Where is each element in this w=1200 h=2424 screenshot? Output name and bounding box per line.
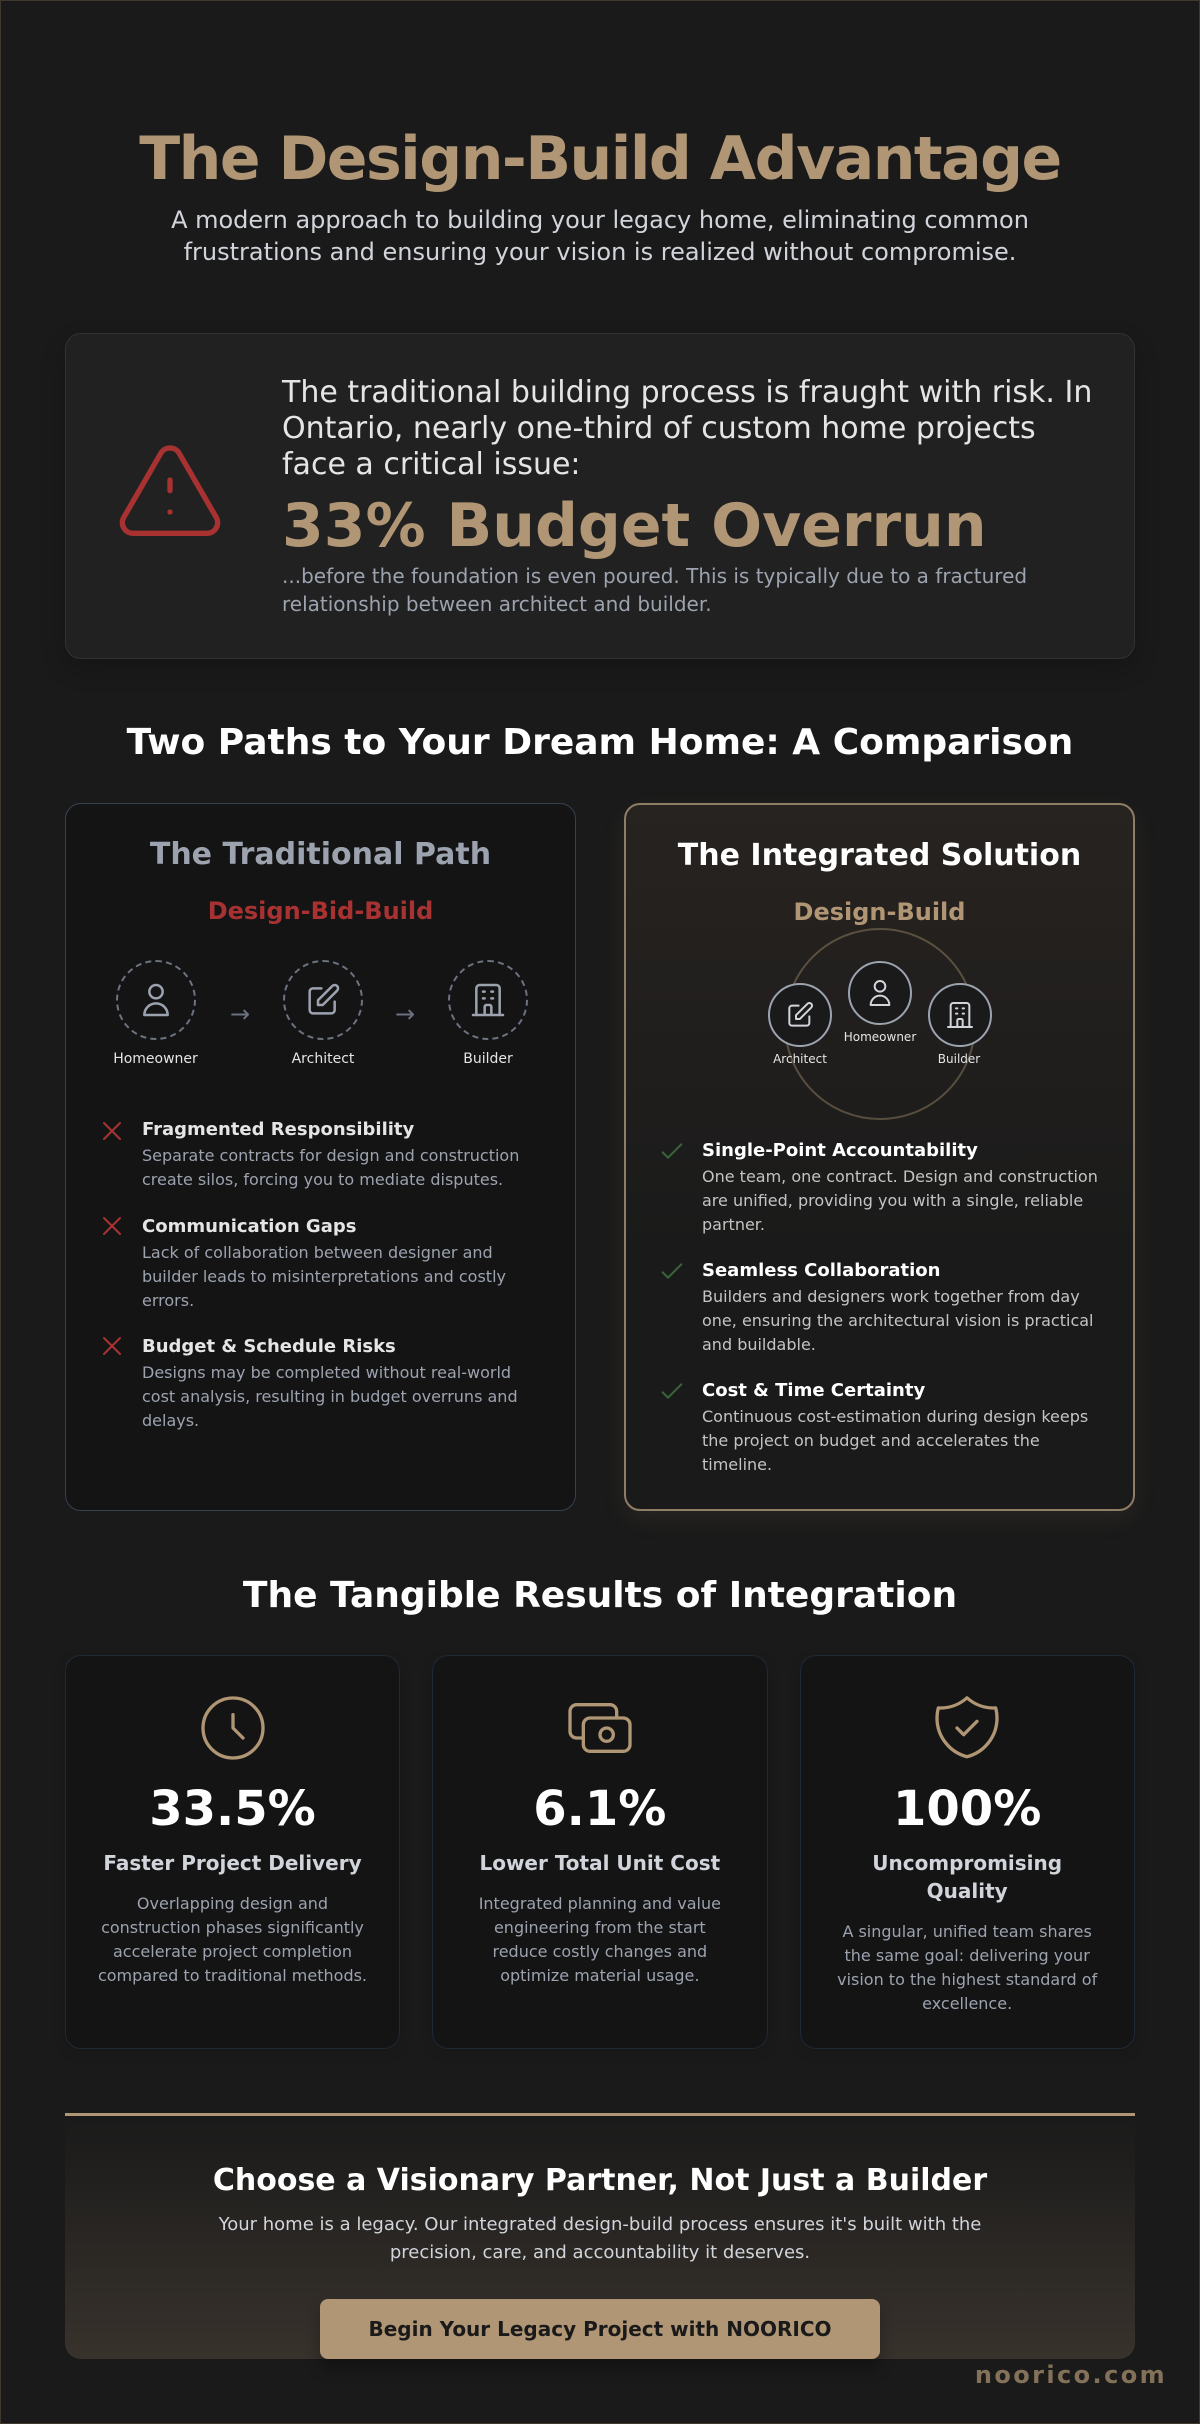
stat description [98, 1894, 367, 1985]
cta button [320, 2299, 880, 2359]
stat description: construction phases significantly [101, 1918, 364, 1937]
heading: comparison: Two Paths to Your Dream Home: A Comparison [127, 722, 1073, 763]
drawback: budget and schedule risks: Budget & Schedule Risks [142, 1336, 396, 1357]
drawback: communication gaps: errors. [142, 1291, 194, 1310]
drawback: fragmented responsibility: create silos, forcing you to mediate disputes. [142, 1170, 503, 1189]
benefit: cost and time certainty: Continuous cost-estimation during design keeps [702, 1407, 1088, 1426]
member: builder: Builder [938, 1052, 980, 1066]
problem statement: The traditional building process is fraught with risk. In [282, 375, 1092, 410]
drawback: budget and schedule risks [142, 1336, 518, 1430]
panel: traditional path [65, 803, 576, 1511]
benefit: seamless collaboration: and buildable. [702, 1335, 816, 1354]
icon: check [662, 1263, 682, 1279]
arrow: → [230, 1000, 250, 1028]
panel: call to action [65, 2113, 1135, 2359]
benefit: cost and time certainty [702, 1380, 1088, 1474]
step: homeowner: Homeowner [113, 1051, 198, 1067]
benefit: cost and time certainty: timeline. [702, 1455, 772, 1474]
cta text: Your home is a legacy. Our integrated design-build process ensures it's built with the [219, 2214, 981, 2235]
stat description: engineering from the start [494, 1918, 706, 1937]
stat description: Integrated planning and value [479, 1894, 721, 1913]
stat description: the same goal: delivering your [845, 1946, 1090, 1965]
benefit: single-point accountability: Single-Point Accountability [702, 1140, 978, 1161]
stat card: lower cost [432, 1655, 768, 2049]
step: builder: Builder [463, 1051, 513, 1067]
subtitle [171, 206, 1029, 266]
arrow: → [395, 1000, 415, 1028]
cta text [218, 2214, 981, 2263]
icon: cross [103, 1122, 121, 1140]
stat value: 6.1% [533, 1781, 666, 1837]
drawback: communication gaps [142, 1216, 506, 1310]
problem statement [282, 375, 1092, 482]
traditional subheading: Design-Bid-Build [208, 897, 433, 925]
subtitle: A modern approach to building your legacy home, eliminating common [171, 206, 1029, 234]
stat description: Overlapping design and [137, 1894, 328, 1913]
benefit: seamless collaboration: Builders and designers work together from day [702, 1287, 1080, 1306]
drawback: budget and schedule risks: delays. [142, 1411, 199, 1430]
drawback: fragmented responsibility: Fragmented Responsibility [142, 1119, 414, 1140]
member: builder [928, 983, 992, 1066]
problem detail [282, 564, 1027, 616]
icon: check [662, 1143, 682, 1159]
stat description: A singular, unified team shares [842, 1922, 1092, 1941]
stat description [479, 1894, 721, 1985]
benefit: single-point accountability: partner. [702, 1215, 765, 1234]
stat description: reduce costly changes and [492, 1942, 707, 1961]
step: architect: Architect [292, 1051, 354, 1067]
outer ring [784, 928, 976, 1120]
problem statement: face a critical issue: [282, 447, 581, 482]
stat description [837, 1922, 1098, 2013]
title: The Design-Build Advantage [139, 124, 1061, 194]
icon: warning triangle [120, 445, 220, 536]
step: architect [283, 960, 363, 1067]
benefit: seamless collaboration: Seamless Collaboration [702, 1260, 940, 1281]
cta text: precision, care, and accountability it deserves. [390, 2242, 810, 2263]
member: homeowner: Homeowner [844, 1030, 916, 1044]
icon: check [662, 1383, 682, 1399]
drawback: communication gaps: Communication Gaps [142, 1216, 356, 1237]
drawback: fragmented responsibility [142, 1119, 519, 1189]
stat label: Lower Total Unit Cost [479, 1851, 720, 1875]
footer brand: noorico.com [975, 2361, 1167, 2389]
heading: results: The Tangible Results of Integration [243, 1575, 957, 1616]
icon: cash [568, 1703, 632, 1753]
stat label: Quality [927, 1879, 1008, 1903]
member: architect [768, 983, 832, 1066]
problem statement: Ontario, nearly one-third of custom home projects [282, 411, 1036, 446]
list: integrated benefits [662, 1140, 1098, 1474]
panel: integrated solution [624, 803, 1135, 1511]
icon: clock [201, 1696, 265, 1760]
stat label: Uncompromising [872, 1851, 1062, 1875]
benefit: single-point accountability: One team, one contract. Design and construction [702, 1167, 1098, 1186]
venn diagram: unified team [768, 928, 992, 1120]
member: architect: Architect [773, 1052, 827, 1066]
benefit: cost and time certainty: the project on budget and accelerates the [702, 1431, 1040, 1450]
stat description: accelerate project completion [113, 1942, 352, 1961]
flow diagram: homeowner to architect to builder [113, 960, 528, 1067]
icon: cross [103, 1217, 121, 1235]
icon: shield check [935, 1696, 999, 1758]
icon: cross [103, 1337, 121, 1355]
stat card: faster delivery [65, 1655, 400, 2049]
stat description: optimize material usage. [500, 1966, 699, 1985]
integrated subheading: Design-Build [794, 898, 965, 926]
cta heading: Choose a Visionary Partner, Not Just a Builder [213, 2163, 987, 2198]
integrated heading: The Integrated Solution [678, 838, 1081, 873]
stat description: compared to traditional methods. [98, 1966, 367, 1985]
panel: budget overrun warning [65, 333, 1135, 659]
member: homeowner [844, 961, 916, 1044]
key figure: 33% budget overrun: 33% Budget Overrun [282, 491, 987, 561]
traditional heading: The Traditional Path [150, 837, 491, 872]
drawback: fragmented responsibility: Separate contracts for design and construction [142, 1146, 519, 1165]
stat card: quality [800, 1655, 1135, 2049]
benefit: seamless collaboration: one, ensuring the architectural vision is practical [702, 1311, 1094, 1330]
step: homeowner [113, 960, 198, 1067]
benefit: seamless collaboration [702, 1260, 1094, 1354]
stat description: vision to the highest standard of [837, 1970, 1097, 1989]
subtitle: frustrations and ensuring your vision is realized without compromise. [184, 238, 1016, 266]
problem detail: ...before the foundation is even poured. This is typically due to a fractured [282, 564, 1027, 588]
benefit: single-point accountability [702, 1140, 1098, 1234]
drawback: communication gaps: Lack of collaboration between designer and [142, 1243, 493, 1262]
benefit: cost and time certainty: Cost & Time Certainty [702, 1380, 925, 1401]
stat label: Faster Project Delivery [103, 1851, 362, 1875]
stat label [872, 1851, 1062, 1903]
drawback: budget and schedule risks: Designs may be completed without real-world [142, 1363, 511, 1382]
step: builder [448, 960, 528, 1067]
drawback: budget and schedule risks: cost analysis, resulting in budget overruns and [142, 1387, 518, 1406]
problem detail: relationship between architect and builder. [282, 592, 712, 616]
stat value: 33.5% [149, 1781, 316, 1837]
list: traditional drawbacks [103, 1119, 519, 1430]
cta button: Begin Your Legacy Project with NOORICO [368, 2317, 832, 2341]
benefit: single-point accountability: are unified, providing you with a single, reliable [702, 1191, 1083, 1210]
stat description: excellence. [922, 1994, 1012, 2013]
drawback: communication gaps: builder leads to misinterpretations and costly [142, 1267, 506, 1286]
stat value: 100% [893, 1781, 1041, 1837]
